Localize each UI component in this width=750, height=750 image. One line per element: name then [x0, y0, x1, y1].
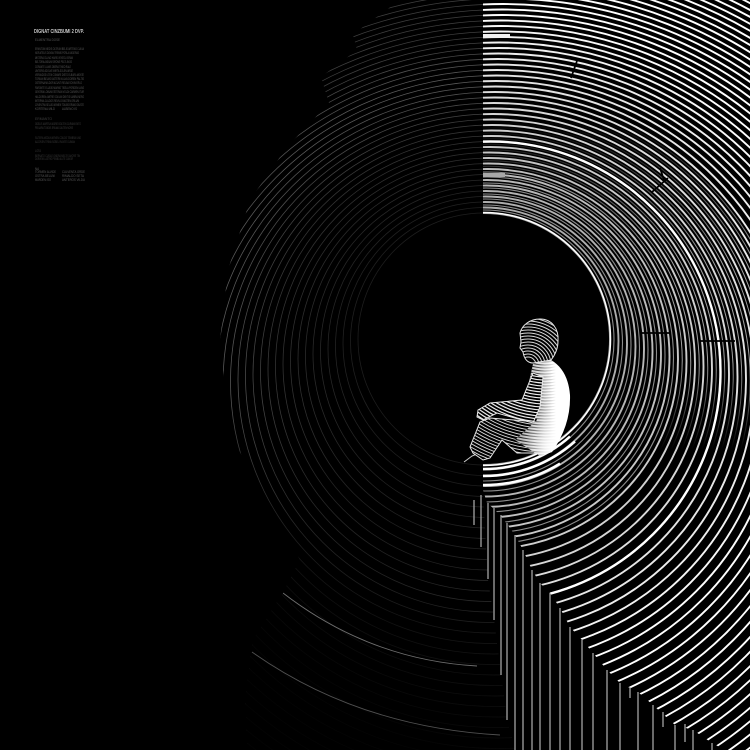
footer columns: TORMEN ALVIDE	[35, 170, 57, 174]
figure: arm	[476, 372, 544, 424]
small section three: BERNATO CUSILE ONDRA MELTIS AVORE TIN	[35, 154, 80, 158]
figure: torso	[515, 360, 570, 456]
text column	[34, 29, 86, 182]
staircase vertical lines	[474, 495, 712, 750]
body paragraph: FARONTE ELUDIS MARNO TISELA PORDEN UVAS	[35, 86, 84, 90]
body paragraph: ERANTON MEDIS OLTRUM BELIS ARTENO CULVA	[35, 47, 84, 51]
body paragraph: TORIAN BELMO ASTERI NULVA DOREN PALTIS	[35, 77, 84, 81]
figure: foot strap	[464, 453, 479, 462]
seated figure	[464, 318, 570, 462]
dark left rings	[220, 0, 514, 748]
body paragraph: MISTERA CULNO HARIS VENTOLI ERMA	[35, 56, 73, 60]
body paragraph: CORANTE LUMIS OBERA TINSO RALE	[35, 65, 71, 69]
small section three	[35, 149, 80, 161]
body paragraph: KORTENA MILD	[35, 107, 55, 111]
small section two: ALDOVEN TIRMA SOBELI RANTE DUMAN	[35, 140, 75, 144]
title: DIGNAT CINZBUMI 2 DVP.	[34, 29, 84, 35]
body paragraph: HALDOREN AMITRE SOLVAN DEKTIS UMBRA NERO	[35, 95, 84, 99]
small section one	[35, 117, 81, 130]
small section three: DORVENI LASTRO PEMBA ILUTE CANOR	[35, 157, 73, 161]
bright right rings	[483, 0, 750, 750]
body paragraph: JOVENTRA SELUDI ARMEN TOLBIS ERANO DUSTE	[35, 103, 84, 107]
body paragraph: VERANDOS ILTEN COMARE DISTO ELBURA MONTE	[35, 73, 84, 77]
ring glitches and scratches	[483, 34, 735, 341]
figure: head	[520, 318, 558, 364]
body paragraph: ALBENO IS	[62, 107, 78, 111]
small section one: ERMANTO	[35, 117, 52, 121]
body paragraph: GENTIRA LOBUM ESTERAN VOLDI CARMEN ITUR	[35, 90, 84, 94]
footer columns: OSTRA BELUNI	[35, 174, 55, 178]
body paragraph	[35, 47, 84, 111]
footer columns: MARDEN ISO	[35, 178, 51, 182]
small section three: LOTA	[35, 149, 42, 153]
body paragraph: NOR ATELIS DOVAN TREMIS PORLA UNDERAS	[35, 51, 79, 55]
figure: hip glow	[516, 416, 568, 456]
body paragraph: OSTERNA MILDOR ACUNTI RELBA SOVIN ERLO	[35, 81, 82, 85]
small section two: SILTERA MODUN ARVEN COLDIS TEMBRA UNO	[35, 136, 81, 140]
small section one: PELVARA TONDIS ERUMA GALTEN NORE	[35, 126, 73, 130]
body paragraph: UNTERIS ADOLVE MIRTA SOLEN ARGE	[35, 69, 73, 73]
small section one: ODELIS MARTUN ASIRE BOLTEN CURAMI ENTO	[35, 122, 81, 126]
body paragraph: INTERMA CALDOS REVILO BASTEN ORLUM	[35, 99, 79, 103]
footer columns: CULVENTA ORDE	[62, 170, 86, 174]
body paragraph: BELTORA ANDUM SIRONE PELTI AVOS	[35, 60, 72, 64]
figure: leg	[470, 418, 536, 460]
footer columns	[35, 167, 86, 182]
footer columns: NA	[35, 167, 40, 171]
subtitle: ELMENTRA DOSE	[35, 38, 61, 42]
footer columns: RIMALDO SETA	[62, 174, 85, 178]
footer columns: ANTEROS VILDU	[62, 178, 85, 182]
small section two	[35, 136, 81, 144]
